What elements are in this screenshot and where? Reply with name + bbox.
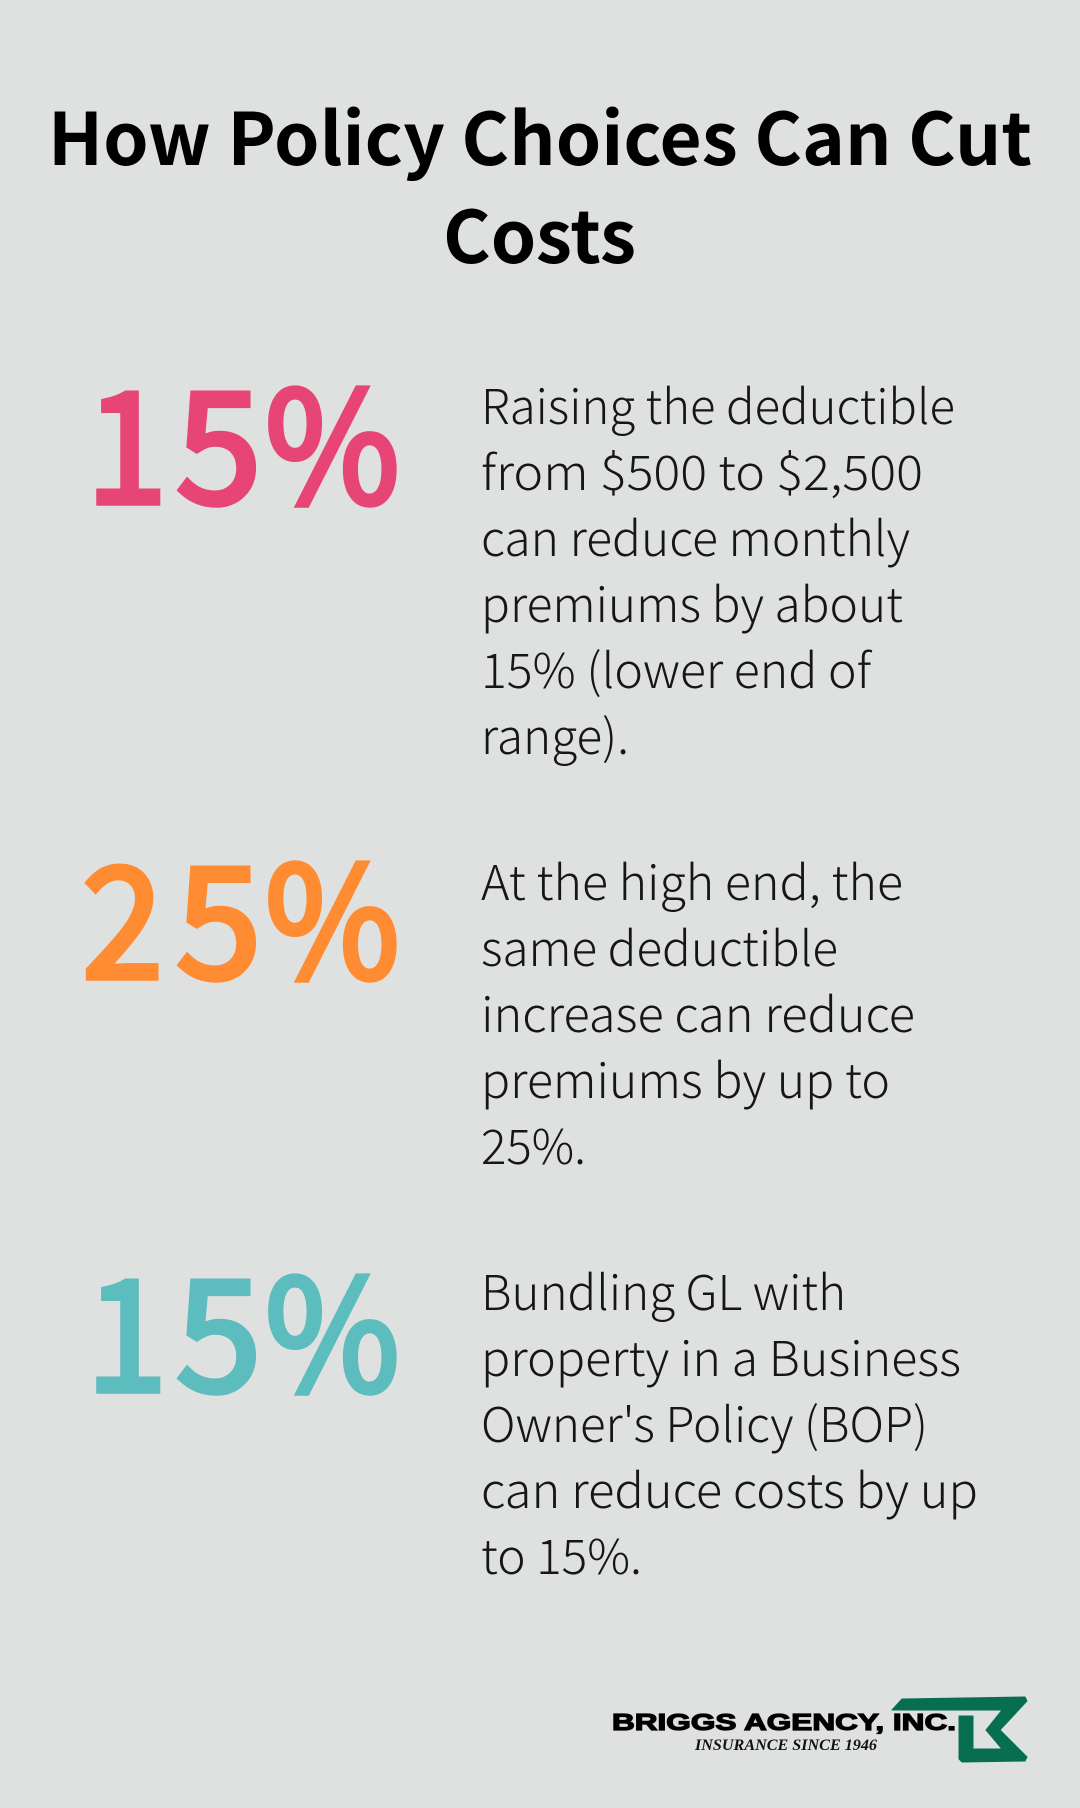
text block: bundling [481, 1254, 978, 1588]
text block: deductible high end: 25%. [481, 1108, 586, 1178]
text block: deductible high end [481, 844, 915, 1178]
text block: deductible low end: from $500 to $2,500 [481, 434, 923, 504]
text block: deductible low end: can reduce monthly [481, 500, 910, 570]
logo tagline: INSURANCE SINCE 1946 [694, 1737, 877, 1754]
stat: 15% [86, 325, 400, 548]
title: Costs [443, 179, 636, 284]
text block: deductible low end: Raising the deductible [481, 368, 955, 438]
text block: bundling: property in a Business [481, 1320, 961, 1390]
text block: deductible high end: At the high end, the [481, 844, 903, 914]
stat: 25%: % [265, 801, 400, 1023]
panel: deductible high end [82, 800, 915, 1178]
text block: bundling: can reduce costs by up [481, 1452, 978, 1522]
stat: 25% [82, 800, 400, 1023]
stat: 15%: 1 [86, 1214, 167, 1436]
icon: green logo mark [892, 1697, 1027, 1762]
logo: Briggs Agency [612, 1697, 1027, 1762]
text block: bundling: Owner's Policy (BOP) [481, 1386, 928, 1456]
text block: bundling: Bundling GL with [481, 1254, 846, 1324]
text block: deductible low end: 15% (lower end of [481, 632, 873, 702]
title: How Policy Choices Can Cut [48, 81, 1032, 186]
text block: deductible high end: premiums by up to [481, 1042, 890, 1112]
text block: deductible low end: premiums by about [481, 566, 903, 636]
text block: bundling: to 15%. [481, 1518, 642, 1588]
stat: 15%: % [265, 1214, 400, 1436]
title [48, 81, 1032, 284]
stat: 15% [86, 1213, 400, 1436]
panel: bundling [86, 1213, 978, 1588]
text block: deductible low end: range). [481, 698, 629, 768]
logo name: BRIGGS AGENCY, INC. [612, 1709, 956, 1735]
stat: 25%: 5 [176, 800, 261, 1023]
stat: 15%: 5 [176, 325, 261, 548]
stat: 25%: 2 [82, 801, 163, 1023]
text block: deductible high end: same deductible [481, 910, 838, 980]
stat: 15%: % [265, 326, 400, 548]
stat: 15%: 5 [176, 1213, 261, 1436]
stat: 15%: 1 [86, 326, 167, 548]
text block: deductible high end: increase can reduce [481, 976, 915, 1046]
text block: deductible low end [481, 368, 955, 768]
panel: deductible low end [86, 325, 955, 768]
